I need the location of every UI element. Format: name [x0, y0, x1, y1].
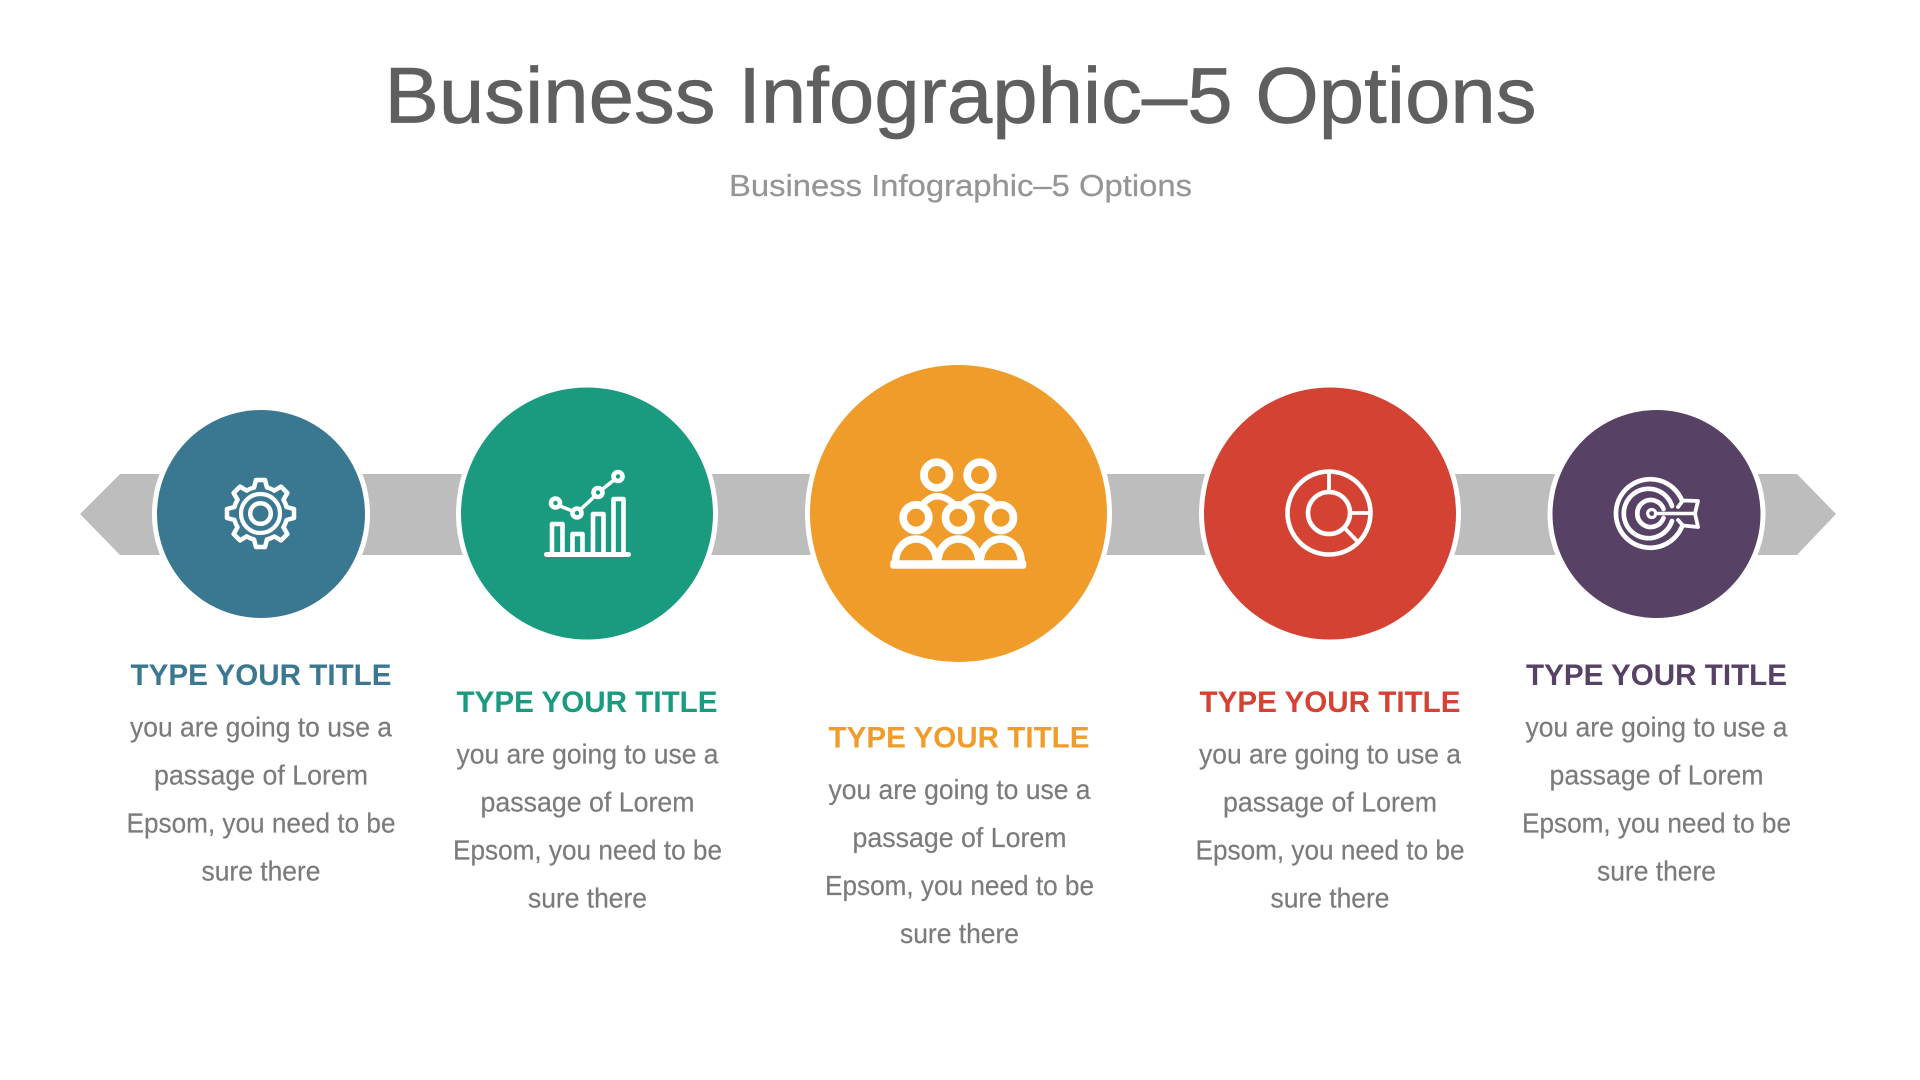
step 3 body text	[825, 774, 1094, 949]
step 1 body text: Epsom, you need to be	[126, 808, 396, 838]
step 2 body text: you are going to use a	[456, 738, 719, 770]
purple disc	[1552, 410, 1760, 618]
step 2: green circle with chart	[456, 382, 718, 644]
step 4 body text: passage of Lorem	[1223, 786, 1437, 818]
step 5 body text: passage of Lorem	[1550, 760, 1764, 790]
step 5 body text	[1522, 712, 1791, 886]
red disc	[1204, 388, 1456, 640]
blue disc	[157, 410, 365, 618]
step 5: purple circle with target	[1548, 405, 1766, 623]
step 3 body text: you are going to use a	[828, 774, 1091, 805]
step 3 heading: TYPE YOUR TITLE	[828, 722, 1090, 754]
step 4 body text	[1196, 738, 1464, 914]
double-headed arrow band	[80, 474, 1836, 555]
step 4: red circle with donut chart	[1199, 382, 1461, 644]
step 3 body text: sure there	[900, 918, 1019, 949]
step 4 body text: you are going to use a	[1199, 738, 1461, 770]
title: Business Infographic–5 Options	[384, 50, 1536, 140]
step 4 body text: Epsom, you need to be	[1196, 834, 1464, 866]
step 3: orange circle with people	[805, 360, 1112, 667]
step 2 body text: passage of Lorem	[480, 786, 694, 818]
step 1 body text	[126, 712, 396, 886]
subtitle: Business Infographic–5 Options	[729, 168, 1192, 203]
step 5 heading: TYPE YOUR TITLE	[1526, 659, 1787, 692]
icon: rising bar chart	[546, 472, 628, 554]
step 1: blue circle with gear	[152, 405, 370, 623]
step 2 body text: Epsom, you need to be	[453, 834, 722, 866]
step 2 body text: sure there	[528, 882, 647, 914]
step 4 heading: TYPE YOUR TITLE	[1200, 686, 1460, 719]
green disc	[461, 388, 713, 640]
step 1 body text: you are going to use a	[130, 712, 392, 742]
step 1 body text: passage of Lorem	[154, 760, 368, 790]
step 4 body text: sure there	[1270, 882, 1390, 914]
step 3 body text: Epsom, you need to be	[825, 870, 1094, 901]
icon: gear	[227, 480, 294, 547]
orange disc	[810, 365, 1107, 662]
icon: target with arrow	[1616, 479, 1698, 548]
step 5 body text: you are going to use a	[1526, 712, 1788, 742]
step 3 body text: passage of Lorem	[852, 822, 1066, 853]
step 5 body text: Epsom, you need to be	[1522, 808, 1791, 838]
step 1 heading: TYPE YOUR TITLE	[130, 659, 392, 692]
step 2 body text	[453, 738, 722, 914]
step 1 body text: sure there	[202, 856, 320, 886]
icon: donut chart	[1288, 472, 1370, 554]
icon: group of people	[893, 462, 1024, 566]
step 2 heading: TYPE YOUR TITLE	[456, 686, 718, 719]
step 5 body text: sure there	[1597, 856, 1716, 886]
